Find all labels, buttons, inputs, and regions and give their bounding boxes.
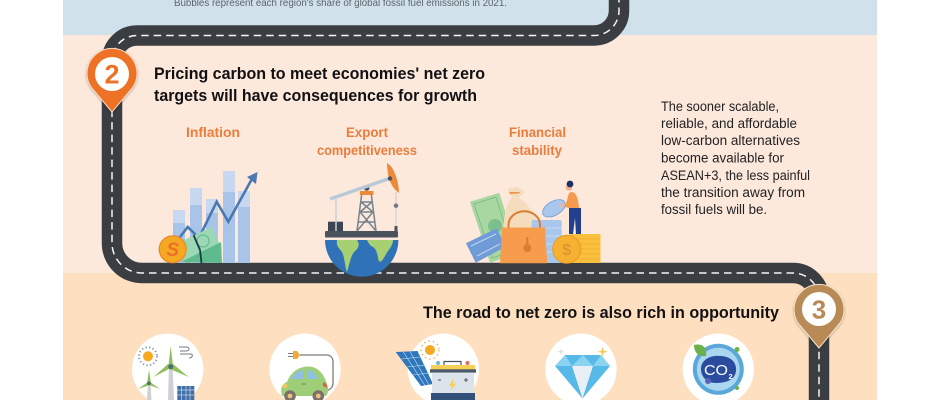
icon: diamond: [545, 334, 617, 400]
text block: low-carbon alternatives: low-carbon alternatives: [661, 133, 800, 148]
icon: inflation chart with money: [159, 171, 258, 263]
icon: electric car: [269, 334, 341, 400]
icon: CO2 capture: 2: [728, 372, 733, 381]
pin 3: 3: [812, 294, 826, 324]
pin 2: [87, 48, 137, 112]
text block: low-carbon alternatives: ASEAN+3, the less painful: [661, 168, 810, 183]
icon: inflation chart with money: S: [166, 240, 179, 261]
heading: opportunity: The road to net zero is also rich in opportunity: [423, 303, 780, 322]
text block: low-carbon alternatives: become available for: [661, 150, 785, 166]
panel: fossil fuel emissions (blue band): [63, 0, 877, 35]
label: inflation: Inflation: [186, 124, 240, 140]
icon: CO2 capture: [683, 334, 754, 400]
heading: pricing carbon: Pricing carbon to meet economies' net zero: [154, 64, 485, 83]
text block: low-carbon alternatives: The sooner scalable,: [661, 99, 779, 114]
pin 2: 2: [104, 60, 120, 90]
icon: money, padlock and coins: $: [562, 242, 571, 259]
icon: CO2 capture: CO: [704, 362, 728, 379]
icon: money, padlock and coins: [466, 181, 600, 263]
icon: solar panel and battery: [396, 334, 479, 400]
text block: low-carbon alternatives: fossil fuels will be.: [661, 202, 767, 217]
label: export competitiveness: Export: [346, 124, 388, 140]
label: financial stability: Financial: [509, 124, 566, 140]
label: export competitiveness: [317, 124, 417, 158]
text block: low-carbon alternatives: [661, 99, 810, 217]
icon: globe with oil pump: [325, 164, 398, 277]
label: financial stability: stability: [512, 142, 562, 158]
winding road: [112, 0, 819, 400]
panel: opportunity (peach band): [63, 273, 877, 400]
heading: pricing carbon: targets will have consequences for growth: [154, 86, 477, 105]
panel: pricing carbon (pink band): [63, 35, 877, 273]
label: export competitiveness: competitiveness: [317, 142, 417, 158]
pin 3: [794, 284, 844, 348]
text block: low-carbon alternatives: the transition away from: [661, 185, 805, 200]
text block: low-carbon alternatives: reliable, and affordable: [661, 116, 797, 131]
heading: pricing carbon: [154, 64, 485, 105]
icon: renewable energy: [132, 334, 203, 400]
label: financial stability: [509, 124, 566, 158]
